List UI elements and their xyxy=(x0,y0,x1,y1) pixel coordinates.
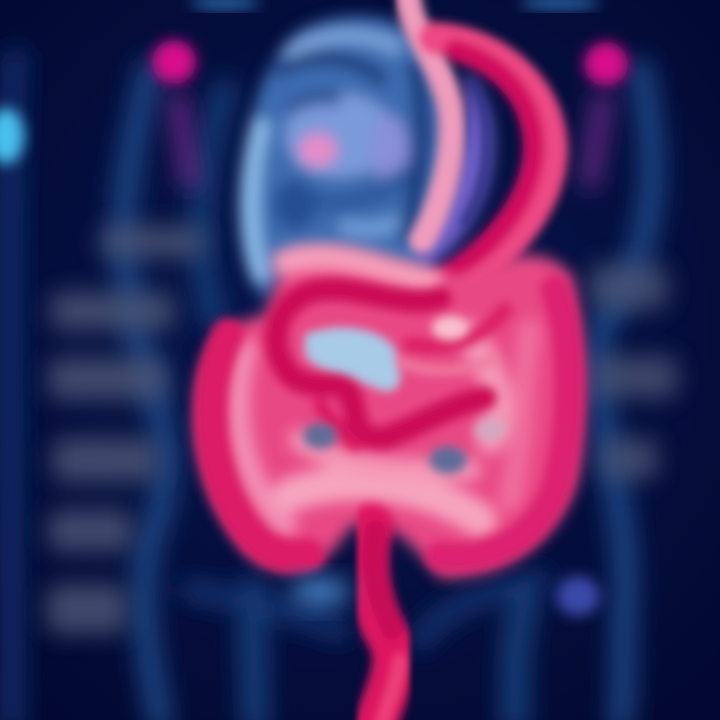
right rib bars xyxy=(588,264,678,480)
light blue glow below intestine xyxy=(290,576,350,608)
small intestine base mass xyxy=(194,251,585,578)
hip blue spot xyxy=(556,576,600,616)
colon dark rim xyxy=(211,290,569,557)
pale highlight xyxy=(432,316,468,340)
dark grey cavities xyxy=(303,419,506,474)
light pink colon interior xyxy=(238,257,530,525)
cyan dot xyxy=(0,108,24,164)
stomach interior purple xyxy=(412,70,493,267)
pink spot xyxy=(298,132,338,168)
central blue cavity xyxy=(305,328,400,391)
stomach band xyxy=(425,38,552,295)
rectum xyxy=(367,525,400,720)
left rib bars xyxy=(46,226,205,634)
crimson small intestine loop xyxy=(276,289,505,445)
magenta joints xyxy=(152,40,628,86)
liver / organ xyxy=(239,16,451,300)
esophagus xyxy=(408,0,452,240)
central organs softened together xyxy=(194,0,585,720)
stomach dark stripe xyxy=(462,80,486,225)
purple glow under joints xyxy=(178,100,603,180)
top highlights xyxy=(190,0,600,9)
